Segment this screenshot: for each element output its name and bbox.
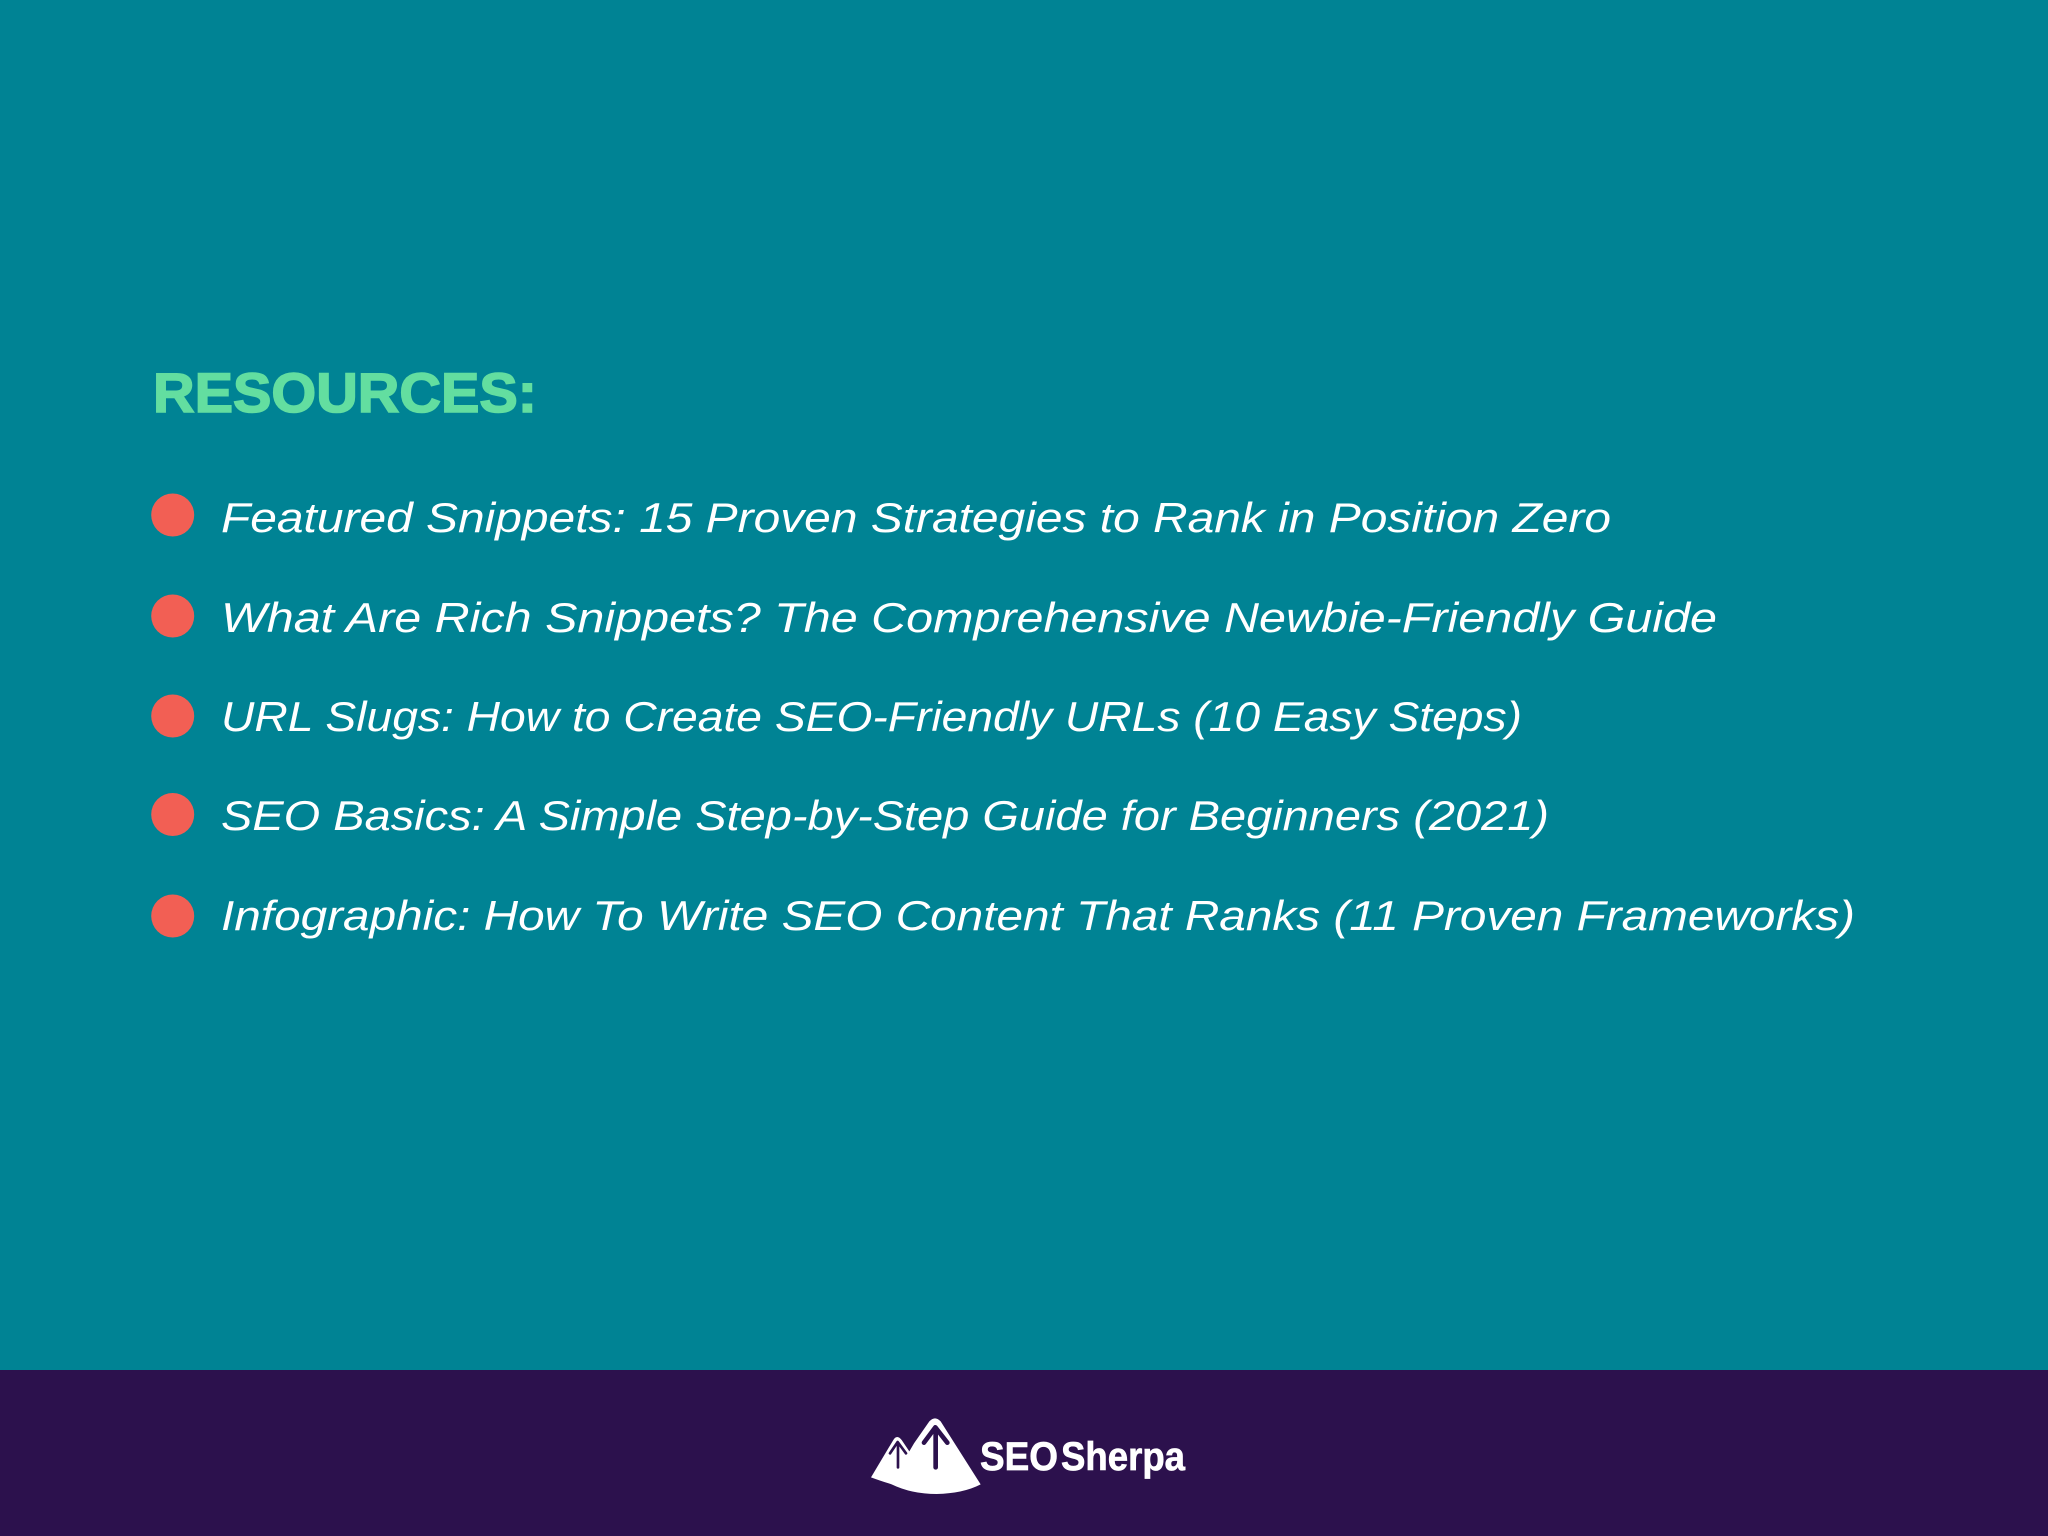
icon: mountains with arrows [871, 1418, 981, 1494]
list item 4: SEO Basics: A Simple Step-by-Step Guide for Beginners (2021) [221, 792, 1549, 839]
list item 3: URL Slugs: How to Create SEO-Friendly URLs (10 Easy Steps) [221, 693, 1522, 740]
list item 5: Infographic: How To Write SEO Content That Ranks (11 Proven Frameworks) [221, 892, 1855, 939]
footer bar [0, 1370, 2048, 1536]
logo wordmark [980, 1435, 1186, 1479]
heading: resources: RESOURCES: [153, 361, 537, 424]
logo wordmark: Sherpa [1061, 1435, 1186, 1479]
list item 2: What Are Rich Snippets? The Comprehensive Newbie-Friendly Guide [221, 594, 1717, 641]
logo wordmark: SEO [980, 1435, 1058, 1479]
list item 1: Featured Snippets: 15 Proven Strategies to Rank in Position Zero [221, 494, 1611, 541]
SEO Sherpa logo [871, 1418, 1186, 1494]
resource list [151, 494, 1855, 939]
